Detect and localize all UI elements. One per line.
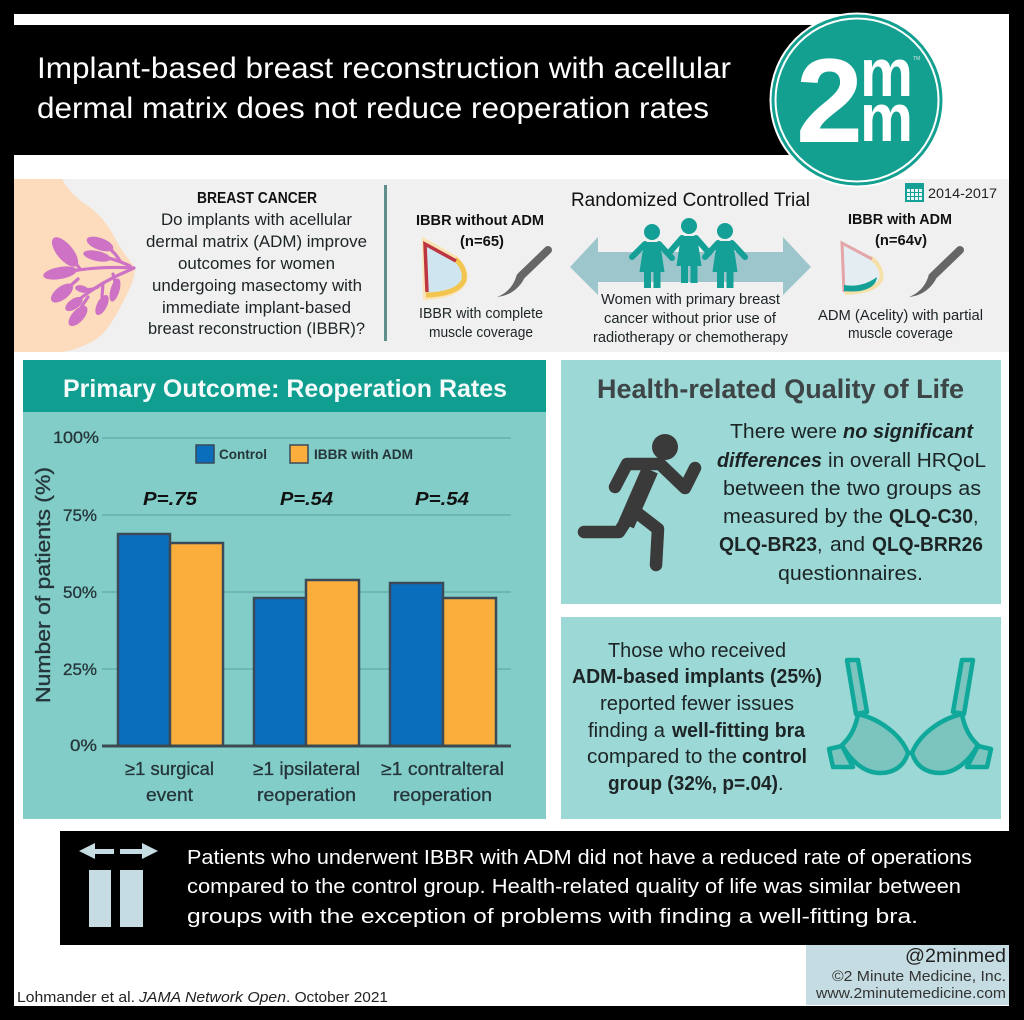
text: bra finding: reported fewer issues	[600, 693, 794, 715]
text: conclusion: Patients who underwent IBBR with ADM did not have a reduced rate of operations	[187, 847, 972, 869]
text: clinical question	[146, 190, 367, 338]
text: bra finding: control	[742, 746, 807, 768]
text: clinical question: dermal matrix (ADM) improve	[146, 233, 367, 251]
bar chart: reoperation rates: ≥1 surgical	[125, 759, 214, 779]
icon: bra	[829, 660, 991, 773]
citation: . October 2021	[286, 990, 388, 1006]
group: IBBR with ADM	[818, 211, 983, 342]
text: HRQoL finding: QLQ-BRR26	[872, 534, 983, 556]
text: bra finding: group (32%, p=.04)	[608, 773, 778, 795]
heading: health-related quality of life: Health-related Quality of Life	[597, 374, 964, 404]
text: study population: cancer without prior use of	[604, 311, 777, 327]
bar chart: reoperation rates: event	[146, 785, 193, 805]
bar chart: reoperation rates: P=.75	[143, 489, 198, 509]
logo: 2 minute medicine	[770, 12, 944, 188]
heading: randomized controlled trial: Randomized Controlled Trial	[571, 190, 810, 211]
text: study population: Women with primary breast	[601, 292, 780, 308]
text: conclusion: groups with the exception of problems with finding a well-fitting bra.	[187, 906, 918, 928]
text: HRQoL finding: measured by the	[723, 506, 883, 528]
text: HRQoL finding: ,	[817, 534, 823, 556]
bar chart: reoperation rates: reoperation	[257, 785, 356, 805]
group: IBBR without ADM	[416, 212, 548, 341]
icon: running person	[584, 434, 695, 565]
icon: arrows and equal bars	[79, 843, 158, 927]
text: bra finding: Those who received	[608, 640, 786, 662]
text: clinical question: undergoing masectomy with	[152, 277, 362, 295]
text: bra finding	[572, 640, 822, 795]
text: bra finding: .	[778, 773, 784, 795]
text: HRQoL finding: and	[830, 534, 865, 556]
logo: 2 minute medicine: TM	[913, 56, 920, 62]
group: IBBR without ADM: (n=65)	[460, 233, 504, 250]
bar chart: reoperation rates: ≥1 contralteral	[381, 759, 504, 779]
text: HRQoL finding	[717, 421, 986, 585]
text: clinical question: breast reconstruction (IBBR)?	[148, 320, 365, 338]
citation: Lohmander et al.	[17, 990, 135, 1006]
footer credits: www.2minutemedicine.com	[815, 986, 1006, 1002]
title banner: Implant-based breast reconstruction with acellular	[37, 52, 731, 85]
text: clinical question: Do implants with acellular	[161, 211, 353, 229]
panel: study background band	[14, 179, 1009, 352]
bar chart: reoperation rates: 50%	[63, 583, 97, 602]
arrow: double-headed randomization arrow	[570, 237, 811, 295]
text: bra finding: well-fitting bra	[671, 720, 806, 742]
text: HRQoL finding: in overall HRQoL	[828, 450, 986, 472]
text: clinical question: outcomes for women	[178, 255, 335, 273]
text: bra finding: ADM-based implants (25%)	[572, 666, 822, 688]
text: clinical question: BREAST CANCER	[197, 190, 317, 207]
icon: calendar with study dates: 2014-2017	[928, 186, 997, 201]
group: IBBR with ADM: IBBR with ADM	[848, 211, 952, 228]
bar chart: reoperation rates: reoperation	[393, 785, 492, 805]
group: IBBR with ADM: (n=64v)	[875, 232, 927, 249]
logo: 2 minute medicine: m	[860, 35, 913, 111]
bar chart: reoperation rates: 75%	[63, 506, 97, 525]
text: study population: radiotherapy or chemotherapy	[593, 330, 789, 346]
footer credits: ©2 Minute Medicine, Inc.	[832, 969, 1006, 985]
heading: primary outcome	[23, 360, 546, 412]
footer credits	[806, 945, 1009, 1005]
text: study population	[593, 292, 789, 346]
panel: health-related quality of life	[561, 360, 1001, 604]
footer credits: @2minmed	[905, 946, 1006, 967]
bar chart: reoperation rates: 100%	[53, 428, 99, 447]
text: HRQoL finding: differences	[717, 450, 822, 472]
text: bra finding: finding a	[588, 720, 666, 742]
text: HRQoL finding: between the two groups as	[723, 478, 981, 500]
bar chart: reoperation rates: ≥1 ipsilateral	[253, 759, 360, 779]
text: HRQoL finding: no significant	[843, 421, 974, 443]
text: HRQoL finding: ,	[973, 506, 979, 528]
group: IBBR without ADM: IBBR without ADM	[416, 212, 544, 229]
icon: three women	[632, 218, 745, 288]
panel: primary outcome	[23, 360, 546, 819]
text: HRQoL finding: questionnaires.	[778, 563, 923, 585]
heading: primary outcome: Primary Outcome: Reoperation Rates	[63, 375, 507, 403]
bar chart: reoperation rates: Number of patients (%)	[33, 467, 55, 703]
bar chart: reoperation rates: P=.54	[415, 489, 469, 509]
group: IBBR with ADM: ADM (Acelity) with partial	[818, 307, 983, 324]
icon: calendar with study dates	[905, 183, 997, 202]
panel: conclusion	[60, 831, 1009, 945]
text: HRQoL finding: QLQ-BR23	[719, 534, 817, 556]
text: conclusion: compared to the control group. Health-related quality of life was similar between	[187, 876, 961, 898]
bar chart: reoperation rates: 25%	[63, 660, 97, 679]
legend: Control	[219, 446, 267, 462]
icon: breast with milk ducts	[14, 179, 135, 352]
text: conclusion	[187, 847, 972, 928]
legend: IBBR with ADM	[314, 446, 413, 462]
panel: well-fitting bra	[561, 617, 1001, 819]
bar chart: reoperation rates	[33, 428, 511, 805]
logo: 2 minute medicine: m	[860, 80, 913, 156]
group: IBBR without ADM: IBBR with complete	[419, 305, 543, 322]
legend	[196, 445, 413, 463]
title banner: dermal matrix does not reduce reoperation rates	[37, 92, 709, 125]
text: HRQoL finding: There were	[730, 421, 837, 443]
title banner	[14, 25, 840, 155]
text: HRQoL finding: QLQ-C30	[889, 506, 973, 528]
bar chart: reoperation rates: 0%	[70, 736, 97, 755]
bar chart: reoperation rates: P=.54	[280, 489, 333, 509]
text: bra finding: compared to the	[587, 746, 737, 768]
citation	[17, 990, 388, 1006]
citation: JAMA Network Open	[138, 990, 286, 1006]
logo: 2 minute medicine: 2	[796, 34, 863, 168]
text: clinical question: immediate implant-based	[162, 299, 351, 317]
group: IBBR with ADM: muscle coverage	[848, 325, 953, 342]
group: IBBR without ADM: muscle coverage	[429, 324, 533, 341]
